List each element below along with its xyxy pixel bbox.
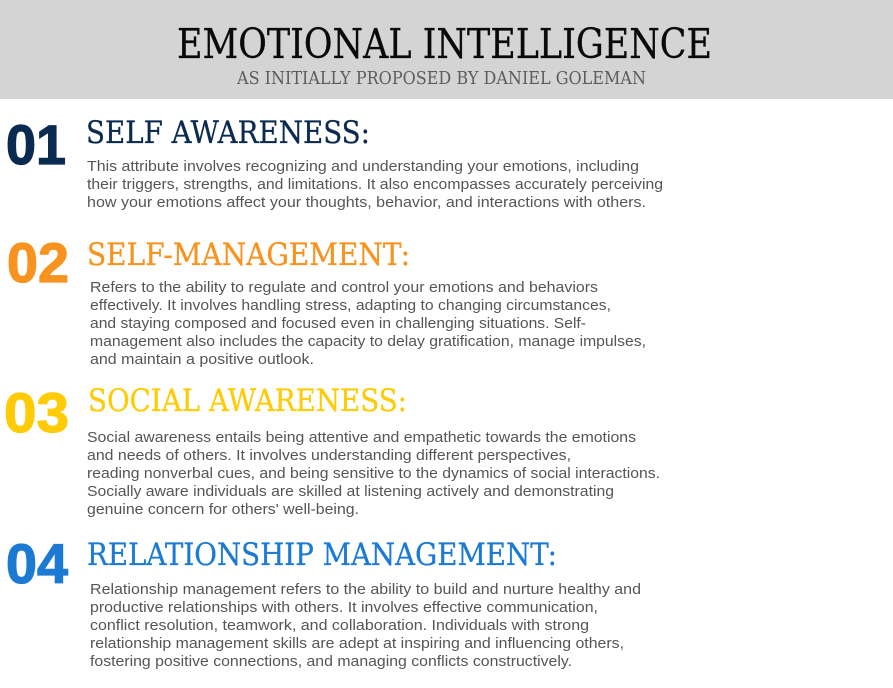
body text: self-management <box>90 279 646 368</box>
body text: self-management: and staying composed and focused even in challenging situations. Self- <box>90 315 586 332</box>
body text: self awareness: how your emotions affect your thoughts, behavior, and interactions with others. <box>87 194 646 211</box>
body text: social awareness: genuine concern for others' well-being. <box>87 501 359 518</box>
heading: self awareness: SELF AWARENESS: <box>86 115 370 151</box>
number 01: 01 <box>6 113 66 176</box>
body text: social awareness: and needs of others. It involves understanding different perspectives, <box>87 447 571 464</box>
section 02: self-management <box>7 231 646 368</box>
heading: social awareness: SOCIAL AWARENESS: <box>88 383 407 419</box>
body text: self awareness: This attribute involves recognizing and understanding your emotions, including <box>87 158 639 175</box>
title: EMOTIONAL INTELLIGENCE <box>177 20 712 68</box>
body text: relationship management: productive relationships with others. It involves effective communication, <box>90 599 598 616</box>
subtitle: AS INITIALLY PROPOSED BY DANIEL GOLEMAN <box>236 68 646 89</box>
body text: relationship management: fostering positive connections, and managing conflicts constructively. <box>90 653 572 670</box>
body text: social awareness: Socially aware individuals are skilled at listening actively and demonstrating <box>87 483 614 500</box>
heading: self-management: SELF-MANAGEMENT: <box>87 237 410 273</box>
body text: relationship management: Relationship management refers to the ability to build and nurture healthy and <box>90 581 641 598</box>
body text: self-management: Refers to the ability to regulate and control your emotions and behaviors <box>90 279 598 296</box>
body text: social awareness: Social awareness entails being attentive and empathetic towards the emotions <box>87 429 636 446</box>
body text: self awareness <box>87 158 663 211</box>
heading: relationship management: RELATIONSHIP MANAGEMENT: <box>87 537 557 573</box>
section 03: social awareness <box>4 381 660 518</box>
body text: relationship management <box>90 581 641 670</box>
number 02: 02 <box>7 231 69 294</box>
body text: social awareness <box>87 429 660 518</box>
section 04: relationship management <box>6 532 641 670</box>
body text: self-management: effectively. It involves handling stress, adapting to changing circumstances, <box>90 297 611 314</box>
number 03: 03 <box>4 381 69 444</box>
number 04: 04 <box>6 532 68 595</box>
section 01: self awareness <box>6 113 663 211</box>
body text: self-management: management also includes the capacity to delay gratification, manage impulses, <box>90 333 646 350</box>
body text: social awareness: reading nonverbal cues, and being sensitive to the dynamics of social interactions. <box>87 465 660 482</box>
body text: self-management: and maintain a positive outlook. <box>90 351 314 368</box>
header banner <box>0 0 893 99</box>
body text: self awareness: their triggers, strengths, and limitations. It also encompasses accurately perceiving <box>87 176 663 193</box>
body text: relationship management: conflict resolution, teamwork, and collaboration. Individuals with strong <box>90 617 589 634</box>
body text: relationship management: relationship management skills are adept at inspiring and influencing others, <box>90 635 624 652</box>
